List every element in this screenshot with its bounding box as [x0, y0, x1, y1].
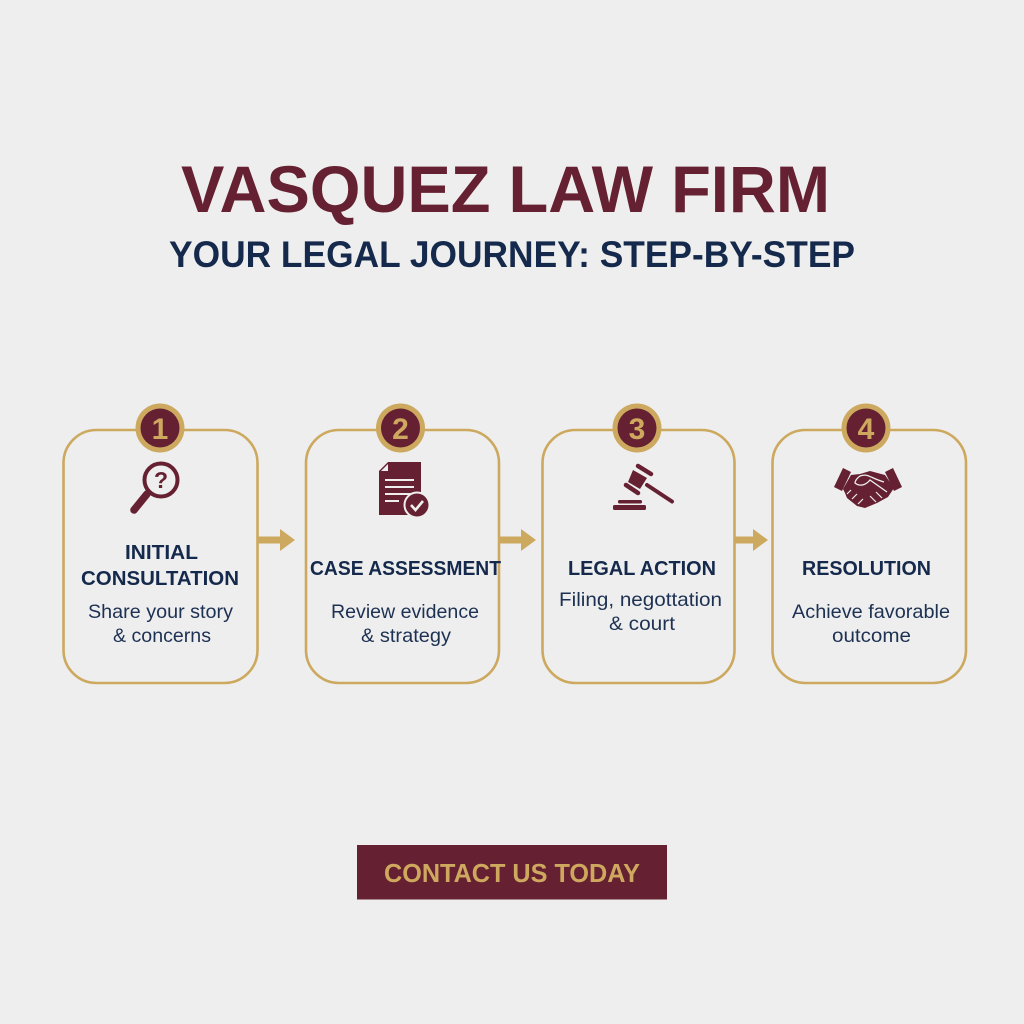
- step 2 description: [331, 601, 479, 647]
- icon: magnifying glass with question mark: [134, 464, 178, 510]
- step 1 heading: INITIAL: [125, 542, 198, 564]
- step 3 number badge: 3: [629, 413, 645, 446]
- step 2 description: Review evidence: [331, 601, 479, 623]
- title: VASQUEZ LAW FIRM: [181, 152, 830, 226]
- panel: step 1 initial consultation: [64, 404, 258, 683]
- step 3 description: [559, 589, 722, 635]
- step 1 number badge: [136, 404, 184, 452]
- step 1 heading: CONSULTATION: [81, 568, 239, 590]
- step 4 number badge: 4: [858, 413, 875, 446]
- step 3 description: & court: [609, 613, 676, 635]
- step 4 heading: RESOLUTION: [802, 558, 931, 580]
- subtitle: YOUR LEGAL JOURNEY: STEP-BY-STEP: [169, 234, 855, 275]
- step 1 number badge: 1: [152, 413, 168, 446]
- step 2 number badge: [376, 404, 425, 452]
- step 2 description: & strategy: [361, 625, 451, 647]
- step 4 description: outcome: [832, 625, 911, 647]
- step 1 description: [88, 601, 233, 647]
- icon: handshake: [834, 468, 902, 508]
- arrow: step 3 to 4: [735, 529, 768, 551]
- step 3 description: Filing, negottation: [559, 589, 722, 611]
- step 2 number badge: 2: [392, 413, 409, 446]
- step 3 heading: LEGAL ACTION: [568, 558, 716, 580]
- step 3 number badge: [612, 404, 662, 452]
- contact button: CONTACT US TODAY: [384, 858, 640, 888]
- arrow: step 1 to 2: [257, 529, 295, 551]
- panel: step 4 resolution: [772, 404, 966, 683]
- step 2 heading: CASE ASSESSMENT: [310, 558, 501, 580]
- step 1 heading: [81, 542, 239, 590]
- contact button: [357, 845, 667, 900]
- step 1 description: & concerns: [113, 625, 211, 647]
- step 1 description: Share your story: [88, 601, 233, 623]
- icon: document with check mark: [379, 462, 430, 518]
- arrow: step 2 to 3: [499, 529, 536, 551]
- icon: gavel: [613, 466, 672, 510]
- panel: step 3 legal action: [542, 404, 734, 683]
- step 4 description: [792, 601, 950, 647]
- panel: step 2 case assessment: [306, 404, 501, 683]
- step 4 number badge: [842, 404, 890, 452]
- step 4 description: Achieve favorable: [792, 601, 950, 623]
- icon: magnifying glass with question mark: ?: [154, 467, 168, 493]
